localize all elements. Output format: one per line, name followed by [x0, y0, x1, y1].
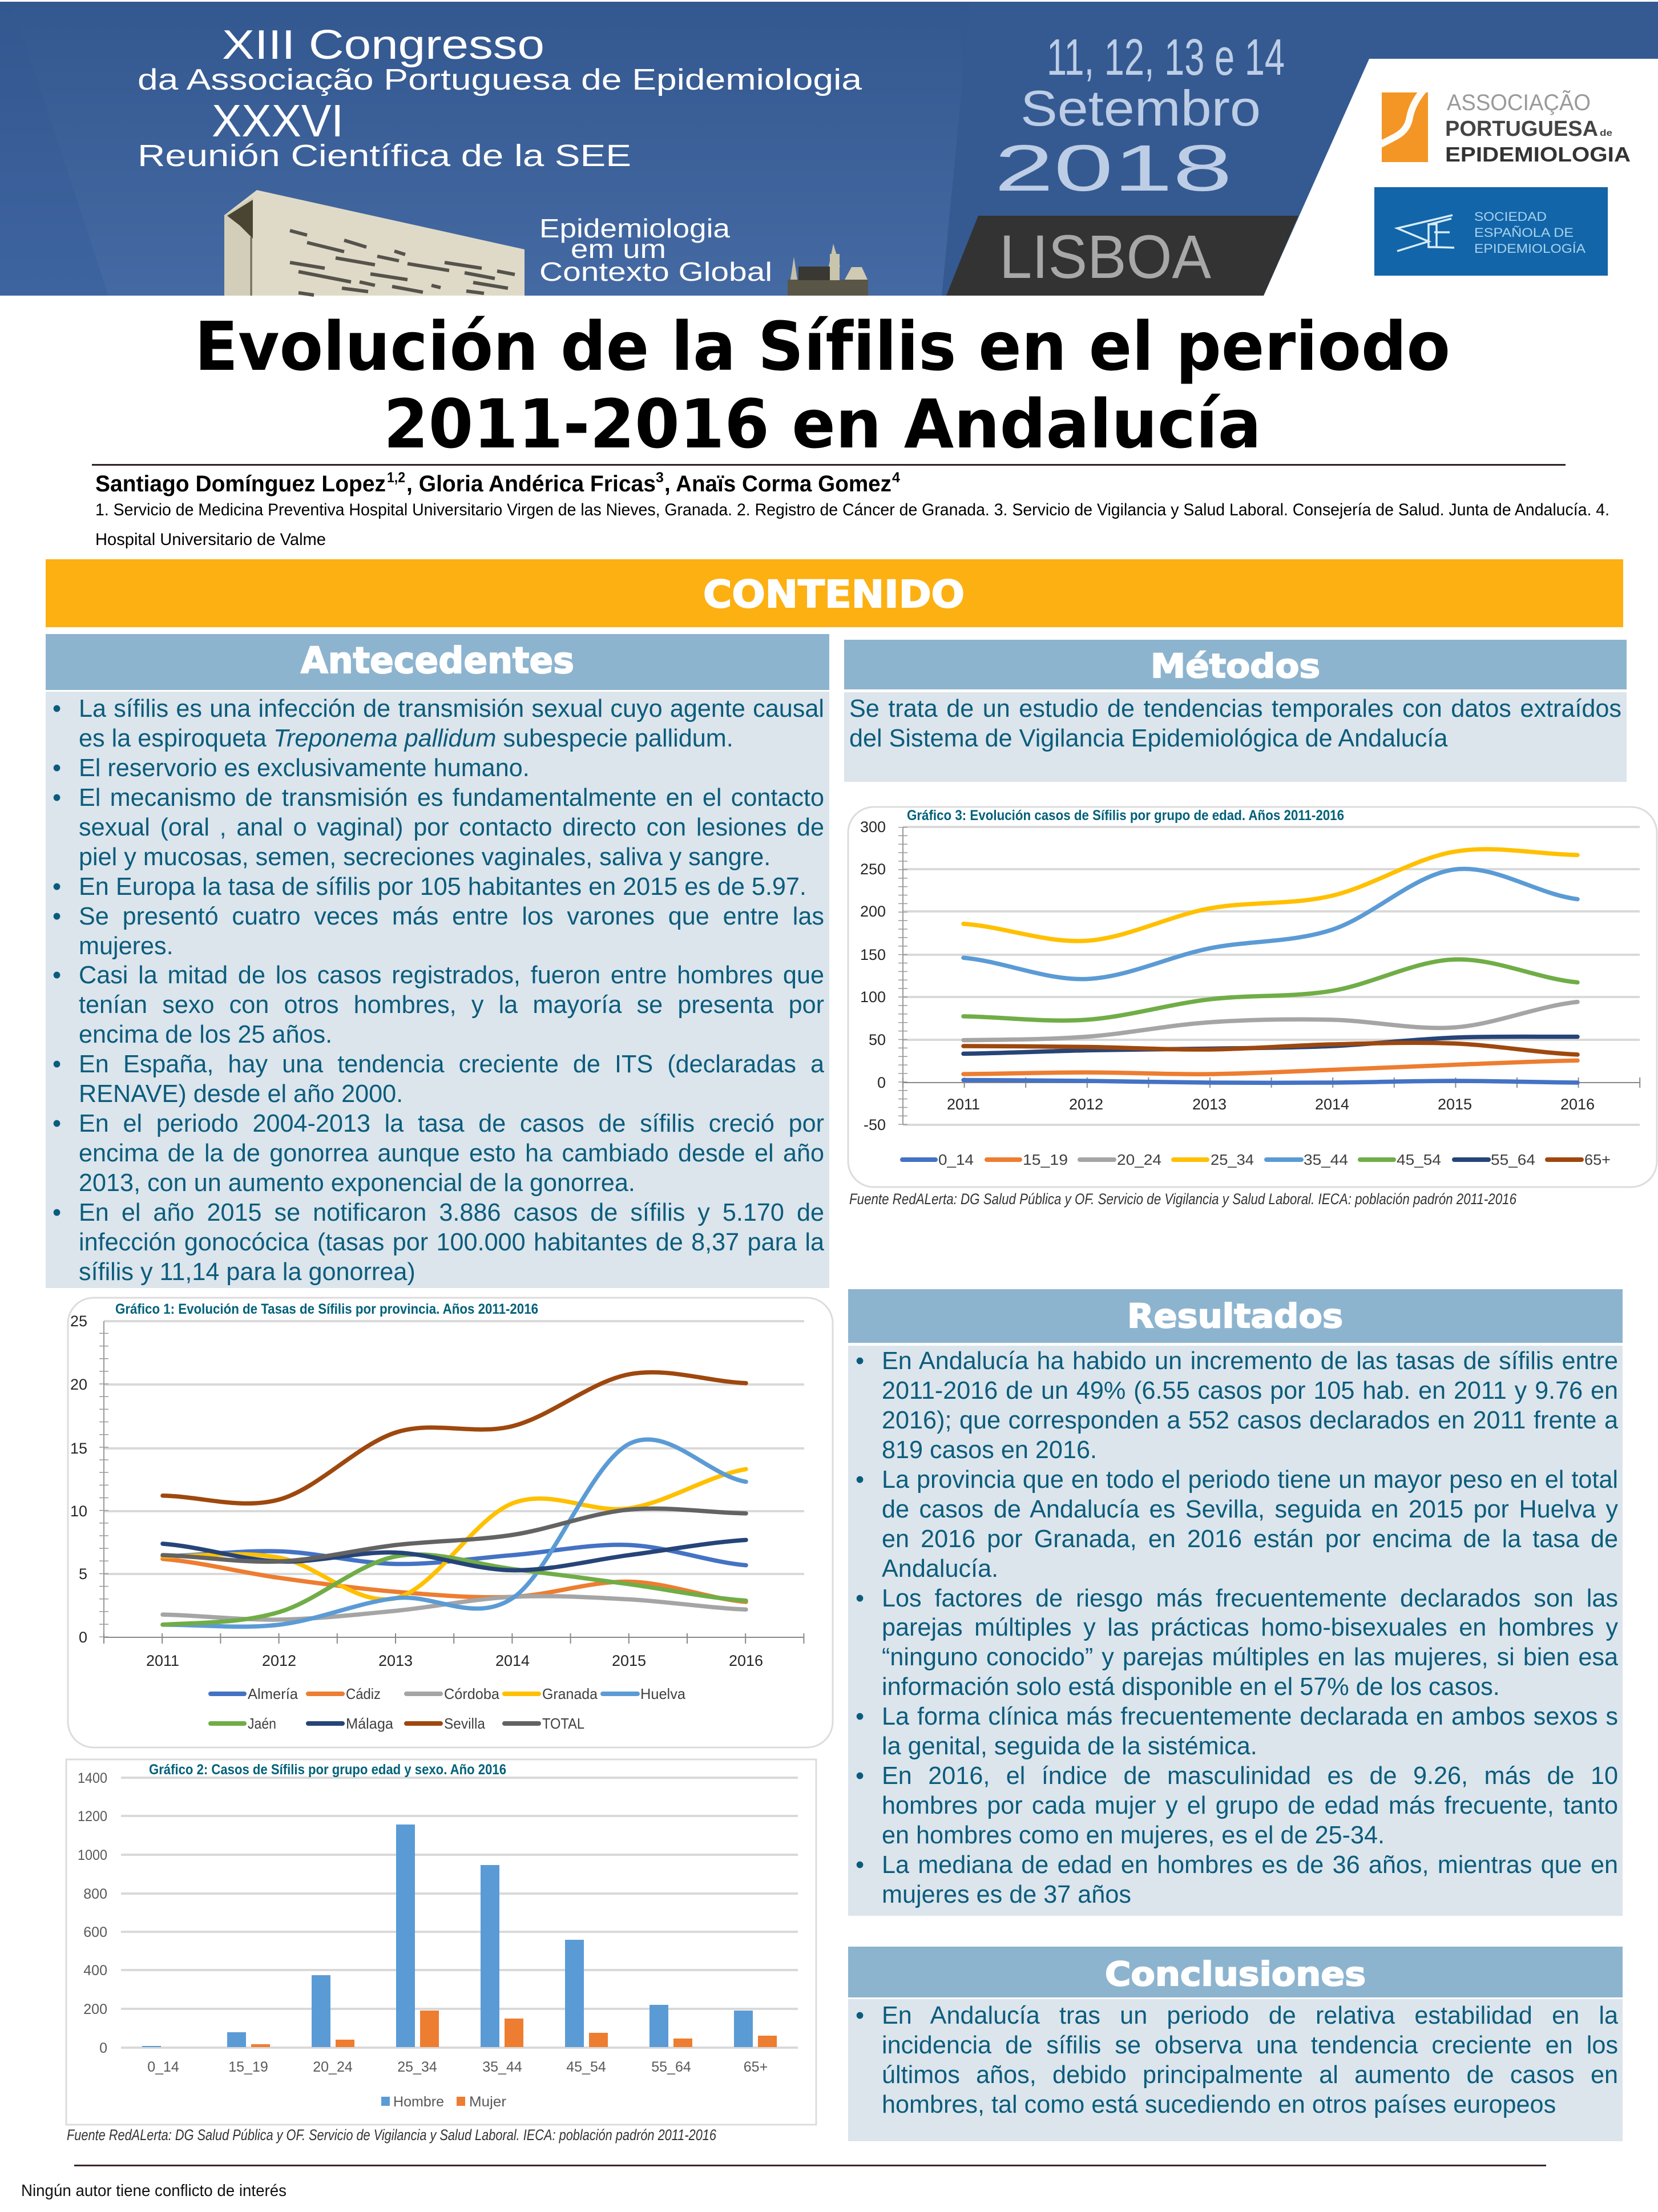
congress theme: Epidemiologia — [539, 213, 730, 243]
text: • — [53, 903, 61, 930]
bullet: mecanismo de transmision: El mecanismo de transmisión es fundamentalmente en el contacto — [79, 784, 824, 812]
text: • — [53, 1051, 61, 1078]
logo: Sociedad Española de Epidemiología: ESPAÑOLA DE — [1474, 225, 1574, 240]
chart 3 legend: 20_24 — [1117, 1151, 1161, 1168]
chart 2 bars: hombre — [142, 1825, 753, 2047]
affiliations: 1. Servicio de Medicina Preventiva Hospital Universitario Virgen de las Nieves, Granada. 2. Registro de Cáncer de Granada. 3. Servicio de Vigilancia y Salud Laboral. Consejería de Salud. Junta de Andalucía. 4. — [95, 500, 1609, 519]
bullet: incremento de tasas: 2016); que corresponden a 552 casos declarados en 2011 frente a — [882, 1407, 1618, 1434]
bullet: ano 2015 — [53, 1199, 824, 1286]
text block: resultados — [856, 1347, 1618, 1908]
chart 3 legend — [902, 1151, 1611, 1168]
chart 3 legend: 15_19 — [1023, 1151, 1068, 1168]
affiliations: Hospital Universitario de Valme — [95, 530, 326, 549]
chart 1: line chart by province: 15 — [70, 1440, 87, 1457]
chart 2: bar chart by age and sex: 25_34 — [397, 2059, 437, 2075]
congress name: da Associação Portuguesa de Epidemiologia — [138, 63, 862, 96]
text block: metodos: Se trata de un estudio de tendencias temporales con datos extraídos — [849, 695, 1621, 722]
logo: Associação Portuguesa de Epidemiologia — [1381, 90, 1631, 166]
bullet: Espana — [53, 1051, 824, 1108]
chart 2: bar chart by age and sex: Gráfico 2: Casos de Sífilis por grupo edad y sexo. Año 2016 — [149, 1762, 506, 1778]
chart 2 legend — [381, 2094, 506, 2110]
bullet: indice de masculinidad: hombres por cada mujer y el grupo de edad más frecuente, tanto — [882, 1792, 1618, 1819]
bullet: varones — [53, 903, 824, 960]
chart 2: bar chart by age and sex: 0 — [99, 2040, 107, 2056]
chart 1 legend: Málaga — [346, 1715, 394, 1732]
bullet: provincias: en 2016 por Granada, en 2016 están por encima de la tasa de — [882, 1525, 1618, 1553]
chart 2: bar chart by age and sex: 1200 — [78, 1809, 107, 1825]
chart 2 legend: Hombre — [393, 2094, 444, 2110]
banner — [0, 2, 1658, 296]
panel: metodos: Métodos — [1151, 647, 1320, 685]
chart 2: bar chart by age and sex: 45_54 — [566, 2059, 606, 2075]
text: • — [53, 1110, 61, 1137]
panel: antecedentes — [46, 634, 829, 1288]
text: • — [53, 754, 61, 782]
congress name: XIII Congresso — [222, 22, 544, 68]
text block: metodos: del Sistema de Vigilancia Epidemiológica de Andalucía — [849, 725, 1447, 752]
bullet: mediana de edad: La mediana de edad en hombres es de 36 años, mientras que en — [882, 1851, 1618, 1879]
bullet: factores de riesgo: “ninguno conocido” y parejas múltiples en las mujeres, si bien esa — [882, 1644, 1618, 1671]
chart 3 legend: 35_44 — [1304, 1151, 1348, 1168]
authors: 3 — [656, 470, 664, 486]
chart 3: line chart by age group: 2014 — [1315, 1096, 1349, 1113]
bullet: hombres con hombres: tenían sexo con otros hombres, y la mayoría se presenta por — [79, 991, 824, 1019]
logo: Sociedad Española de Epidemiología — [1374, 187, 1608, 276]
bullet: forma clinica: La forma clínica más frecuentemente declarada en ambos sexos s — [882, 1703, 1618, 1730]
chart 1 legend: Córdoba — [444, 1685, 500, 1702]
bullet: incremento de tasas: 2011-2016 de un 49% (6.55 casos por 105 hab. en 2011 y 9.76 en — [882, 1377, 1618, 1404]
bullet: provincias: La provincia que en todo el periodo tiene un mayor peso en el total — [882, 1466, 1618, 1493]
chart 2: bar chart by age and sex: 65+ — [744, 2059, 768, 2075]
chart 3: line chart by age group: 250 — [860, 861, 886, 878]
chart 1: line chart by province: 10 — [70, 1503, 87, 1520]
chart 1 legend — [211, 1685, 686, 1732]
bullet: periodo 2004-2013: En el periodo 2004-2013 la tasa de casos de sífilis creció por — [79, 1110, 824, 1137]
chart 2 bars: mujer — [251, 2011, 777, 2047]
bullet: ano 2015: sífilis y 11,14 para la gonorrea) — [79, 1258, 415, 1286]
chart 1: line chart by province: 20 — [70, 1376, 87, 1393]
bullet: incremento de tasas: En Andalucía ha habido un incremento de las tasas de sífilis entre — [882, 1347, 1618, 1375]
chart 2: bar chart by age and sex: 0_14 — [147, 2059, 179, 2075]
chart 1: line chart by province: 2011 — [146, 1652, 179, 1669]
chart 2: bar chart by age and sex: 600 — [83, 1924, 107, 1940]
bullet: periodo 2004-2013 — [53, 1110, 824, 1197]
banner white corner — [1264, 59, 1658, 296]
chart 3: line chart by age group: 300 — [860, 818, 886, 835]
congress dates: 11, 12, 13 e 14 — [1047, 29, 1285, 86]
chart 1 series — [163, 1373, 746, 1626]
chart 1 legend: Sevilla — [444, 1715, 486, 1732]
congress name — [138, 22, 862, 173]
panel: conclusiones — [848, 1947, 1623, 2141]
Lisboa band — [946, 216, 1298, 296]
panel: antecedentes: Antecedentes — [301, 640, 574, 681]
chart 2: bar chart by age and sex: 200 — [83, 2001, 107, 2017]
bullet: factores de riesgo — [856, 1584, 1618, 1701]
bullet: hombres con hombres: Casi la mitad de los casos registrados, fueron entre hombres que — [79, 962, 824, 989]
authors: Santiago Domínguez Lopez — [95, 471, 386, 497]
bullet: varones: Se presentó cuatro veces más entre los varones que entre las — [79, 903, 824, 930]
chart 3: line chart by age group: 2012 — [1069, 1096, 1103, 1113]
chart 2: bar chart by age and sex: 400 — [83, 1963, 107, 1979]
text: • — [856, 1584, 864, 1612]
chart 3: line chart by age group: 2016 — [1560, 1096, 1595, 1113]
chart 1: line chart by province: 5 — [79, 1565, 87, 1583]
conflict of interest note: Ningún autor tiene conflicto de interés — [21, 2182, 287, 2200]
text: • — [856, 1851, 864, 1879]
bullet: forma clinica — [856, 1703, 1618, 1760]
bullet: mediana de edad: mujeres es de 37 años — [882, 1881, 1131, 1908]
Lisboa band: LISBOA — [999, 222, 1211, 291]
panel: metodos — [844, 640, 1627, 782]
chart 1 legend: Jaén — [248, 1715, 276, 1732]
title: 2011-2016 en Andalucía — [384, 385, 1261, 463]
chart 3 legend: 65+ — [1584, 1151, 1611, 1168]
bullet: factores de riesgo: información solo está disponible en el 57% de los casos. — [882, 1673, 1500, 1701]
contenido banner — [46, 559, 1623, 627]
text block: conclusiones: hombres, tal como está sucediendo en otros países europeos — [882, 2091, 1556, 2118]
chart 1: line chart by province: 2014 — [495, 1652, 530, 1669]
bullet: agente causal — [53, 695, 824, 752]
congress dates — [994, 29, 1285, 205]
congress dates: Setembro — [1020, 80, 1261, 136]
chart 3 legend: 25_34 — [1211, 1151, 1254, 1168]
chart 1 legend: Granada — [542, 1685, 598, 1702]
authors: 4 — [892, 470, 900, 486]
bullet: periodo 2004-2013: 2013, con un aumento exponencial de la gonorrea. — [79, 1169, 635, 1197]
bullet: forma clinica: la genital, seguida de la sistémica. — [882, 1733, 1257, 1760]
text: • — [53, 962, 61, 989]
bullet: incremento de tasas: 819 casos en 2016. — [882, 1436, 1097, 1464]
text block: antecedentes — [53, 695, 824, 1286]
chart 2: bar chart by age and sex: 1400 — [78, 1770, 107, 1786]
chart 1: line chart by province — [68, 1298, 833, 1747]
bullet: indice de masculinidad — [856, 1762, 1618, 1849]
chart 2: bar chart by age and sex: 20_24 — [313, 2059, 353, 2075]
chart 1: line chart by province: Gráfico 1: Evolución de Tasas de Sífilis por provincia. Años 2011-2016 — [115, 1301, 538, 1317]
bullet: provincias: de casos de Andalucía es Sevilla, seguida en 2015 por Huelva y — [882, 1496, 1618, 1523]
bullet: factores de riesgo: Los factores de riesgo más frecuentemente declarados son las — [882, 1584, 1618, 1612]
text: • — [856, 2002, 864, 2029]
bullet: provincias: Andalucía. — [882, 1555, 998, 1583]
logo: Associação Portuguesa de Epidemiologia: de — [1600, 128, 1612, 138]
chart 3: line chart by age group: 2011 — [947, 1096, 980, 1113]
chart 3: line chart by age group: 100 — [860, 988, 886, 1006]
bullet: ano 2015: En el año 2015 se notificaron 3.886 casos de sífilis y 5.170 de — [79, 1199, 824, 1226]
chart 1 legend: Almería — [248, 1685, 298, 1702]
chart 3 legend: 0_14 — [938, 1151, 974, 1168]
chart 1 legend: TOTAL — [542, 1715, 584, 1732]
chart 3: line chart by age group: 150 — [860, 946, 886, 963]
congress theme: Contexto Global — [539, 257, 772, 286]
bullet: ano 2015: infección gonocócica (tasas por 100.000 habitantes de 8,37 para la — [79, 1229, 824, 1256]
bullet: incremento de tasas — [856, 1347, 1618, 1464]
chart 2 legend: Mujer — [469, 2094, 506, 2110]
bullet: varones: mujeres. — [79, 933, 174, 960]
source note: chart 2: Fuente RedALerta: DG Salud Pública y OF. Servicio de Vigilancia y Salud Laboral. IECA: población padrón 2011-2016 — [67, 2126, 717, 2144]
chart 1: line chart by province: 2016 — [729, 1652, 763, 1669]
chart 2: bar chart by age and sex: 1000 — [78, 1847, 107, 1863]
text block: conclusiones: En Andalucía tras un periodo de relativa estabilidad en la — [882, 2002, 1618, 2029]
chart 2: bar chart by age and sex — [66, 1759, 816, 2125]
logo: Sociedad Española de Epidemiología: EPIDEMIOLOGÍA — [1474, 241, 1586, 256]
text block: metodos — [849, 695, 1621, 752]
bullet: agente causal: es la espiroqueta Treponema pallidum subespecie pallidum. — [79, 725, 733, 752]
bullet: hombres con hombres: encima de los 25 años. — [79, 1021, 332, 1048]
authors: , Gloria Andérica Fricas — [406, 471, 656, 497]
chart 3: line chart by age group: -50 — [864, 1116, 886, 1133]
bullet: mecanismo de transmision: sexual (oral , anal o vaginal) por contacto directo con lesiones de — [79, 814, 824, 841]
chart 2: bar chart by age and sex: 55_64 — [651, 2059, 691, 2075]
bullet: periodo 2004-2013: encima de la de gonorrea aunque esto ha cambiado desde el año — [79, 1140, 824, 1167]
bullet: mecanismo de transmision — [53, 784, 824, 871]
chart 1: line chart by province: 2015 — [612, 1652, 646, 1669]
congress name: XXXVI — [212, 95, 344, 146]
chart 1 legend: Huelva — [640, 1685, 686, 1702]
chart 3 series — [963, 849, 1578, 1083]
chart 1: line chart by province: 2012 — [262, 1652, 296, 1669]
bullet: indice de masculinidad: En 2016, el índice de masculinidad es de 9.26, más de 10 — [882, 1762, 1618, 1790]
bullet: mecanismo de transmision: piel y mucosas, semen, secreciones vaginales, saliva y sangre. — [79, 843, 770, 871]
chart 1: line chart by province: 0 — [79, 1629, 87, 1646]
logo: Sociedad Española de Epidemiología: SOCIEDAD — [1474, 209, 1547, 224]
text: • — [856, 1347, 864, 1375]
bullet: hombres con hombres — [53, 962, 824, 1048]
text block: conclusiones: últimos años, debido principalmente al aumento de casos en — [882, 2061, 1618, 2089]
bullet: agente causal: La sífilis es una infección de transmisión sexual cuyo agente causal — [79, 695, 824, 722]
chart 3 legend: 45_54 — [1397, 1151, 1441, 1168]
bullet: Espana: En España, hay una tendencia creciente de ITS (declaradas a — [79, 1051, 824, 1078]
affiliations — [95, 500, 1609, 549]
chart 3: line chart by age group: 2015 — [1438, 1096, 1472, 1113]
title: Evolución de la Sífilis en el periodo — [195, 307, 1450, 386]
tower — [788, 244, 868, 296]
bullet: tasa en Europa: En Europa la tasa de sífilis por 105 habitantes en 2015 es de 5.97. — [79, 873, 806, 901]
authors: 1,2 — [387, 470, 405, 486]
chart 3: line chart by age group: 0 — [877, 1074, 886, 1091]
title — [195, 307, 1450, 463]
text: • — [856, 1466, 864, 1493]
contenido banner: CONTENIDO — [703, 572, 965, 616]
panel: resultados: Resultados — [1127, 1297, 1343, 1335]
building — [224, 190, 525, 296]
chart 1: line chart by province: 25 — [70, 1313, 87, 1330]
chart 2: bar chart by age and sex: 35_44 — [482, 2059, 522, 2075]
chart 2: bar chart by age and sex: 800 — [83, 1886, 107, 1902]
logo: Associação Portuguesa de Epidemiologia: ASSOCIAÇÃO — [1447, 90, 1591, 115]
text: • — [53, 1199, 61, 1226]
text block: conclusiones — [882, 2001, 1618, 2120]
chart 3: line chart by age group: Gráfico 3: Evolución casos de Sífilis por grupo de edad. Años 2011-2016 — [907, 808, 1344, 824]
bullet: indice de masculinidad: en hombres como en mujeres, es el de 25-34. — [882, 1822, 1385, 1849]
bullet: factores de riesgo: parejas múltiples y las prácticas homo-bisexuales en hombres y — [882, 1614, 1618, 1641]
bullet: reservorio: El reservorio es exclusivamente humano. — [79, 754, 530, 782]
text: • — [53, 784, 61, 812]
bullet: Espana: RENAVE) desde el año 2000. — [79, 1080, 403, 1108]
panel: resultados — [848, 1289, 1623, 1916]
text block: conclusiones: incidencia de sífilis se observa una tendencia creciente en los — [882, 2032, 1618, 2059]
chart 1 legend: Cádiz — [346, 1685, 381, 1702]
chart 1: line chart by province: 2013 — [378, 1652, 413, 1669]
panel: conclusiones: Conclusiones — [1105, 1955, 1366, 1993]
chart 3 legend: 55_64 — [1491, 1151, 1535, 1168]
text: • — [856, 1703, 864, 1730]
text: • — [53, 695, 61, 722]
authors: , Anaïs Corma Gomez — [664, 471, 891, 497]
text: • — [856, 1762, 864, 1790]
source note: chart 3: Fuente RedALerta: DG Salud Pública y OF. Servicio de Vigilancia y Salud Laboral. IECA: población padrón 2011-2016 — [849, 1190, 1517, 1208]
logo: Associação Portuguesa de Epidemiologia: PORTUGUESA — [1445, 117, 1598, 141]
chart 2: bar chart by age and sex: 15_19 — [228, 2059, 268, 2075]
congress dates: 2018 — [994, 132, 1232, 205]
congress name: Reunión Científica de la SEE — [138, 139, 631, 173]
chart 3: line chart by age group: 200 — [860, 903, 886, 920]
bullet: mediana de edad — [882, 1851, 1618, 1910]
authors — [95, 470, 900, 497]
congress theme — [539, 213, 772, 286]
congress theme: em um — [571, 234, 666, 264]
bullet: provincias — [856, 1466, 1618, 1583]
text: • — [53, 873, 61, 901]
chart 3: line chart by age group: 2013 — [1192, 1096, 1227, 1113]
logo: Associação Portuguesa de Epidemiologia: EPIDEMIOLOGIA — [1445, 143, 1631, 166]
chart 3: line chart by age group: 50 — [869, 1031, 886, 1048]
chart 3: line chart by age group — [848, 807, 1657, 1187]
